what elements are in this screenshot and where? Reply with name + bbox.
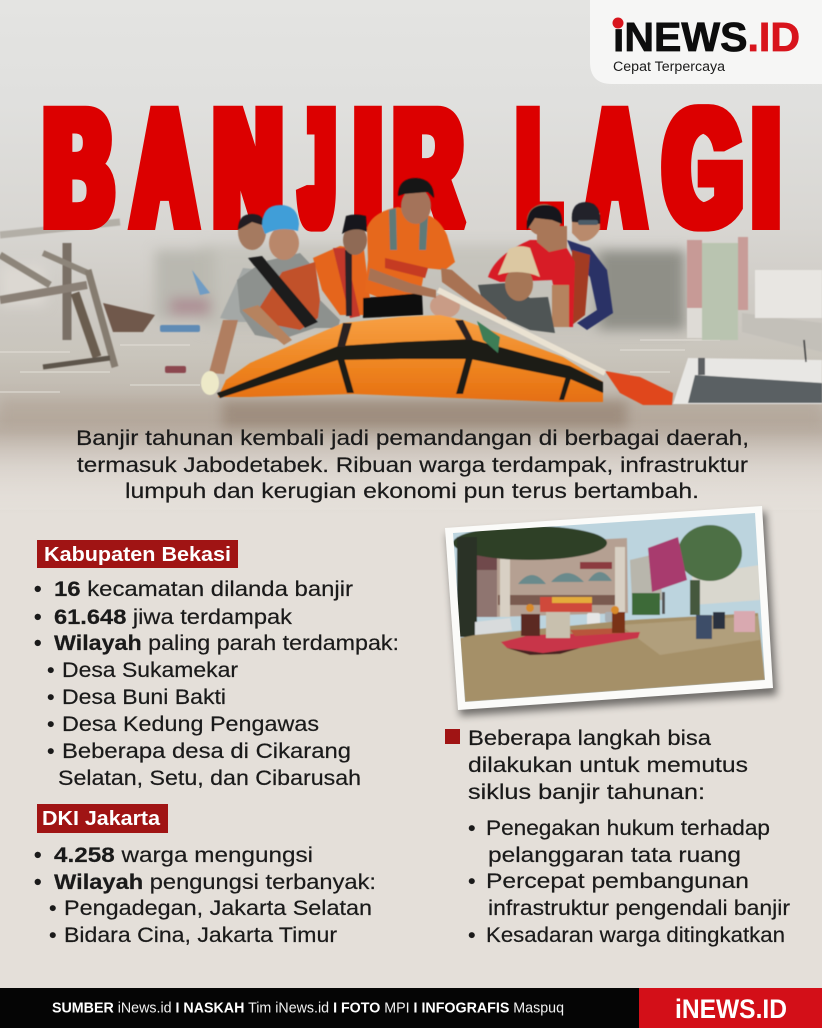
list: steps: Penegakan hukum terhadap xyxy=(486,816,770,840)
list: steps: • xyxy=(468,816,476,840)
callout: steps to break the flood cycle xyxy=(445,726,790,947)
list: steps: pelanggaran tata ruang xyxy=(488,843,741,867)
intro paragraph: termasuk Jabodetabek. Ribuan warga terdampak, infrastruktur xyxy=(77,453,748,477)
person: blue helmet, orange life vest xyxy=(237,205,340,345)
floodwater xyxy=(460,613,765,702)
person: woman behind boat xyxy=(430,294,460,318)
pillars and wall on the right xyxy=(687,237,822,352)
wooden structure on the left xyxy=(0,222,120,367)
buildings xyxy=(630,553,662,600)
title: L xyxy=(519,76,559,261)
heading: DKI Jakarta: DKI Jakarta xyxy=(42,808,161,830)
title: B xyxy=(45,76,112,261)
list: Bekasi facts xyxy=(34,577,399,790)
list: Bekasi facts: • xyxy=(34,631,42,655)
list: steps: • xyxy=(468,869,476,893)
list: Bekasi facts: Desa Buni Bakti xyxy=(62,685,226,709)
intro paragraph xyxy=(76,426,749,503)
boat xyxy=(217,315,603,402)
list: steps xyxy=(468,816,790,947)
title: I xyxy=(754,76,778,261)
list: Bekasi facts: Desa Kedung Pengawas xyxy=(62,712,319,736)
red rescue boat xyxy=(501,632,640,653)
list: Jakarta facts xyxy=(34,843,376,947)
person: navy shirt, right rear xyxy=(567,202,613,330)
credits: SUMBER iNews.id I NASKAH Tim iNews.id I FOTO MPI I INFOGRAFIS Maspuq xyxy=(52,1000,564,1016)
list: Bekasi facts: 61.648 jiwa terdampak xyxy=(54,605,292,629)
logo: iNEWS.ID: Cepat Terpercaya xyxy=(613,59,726,74)
banner xyxy=(540,597,592,612)
list: Jakarta facts: Bidara Cina, Jakarta Timur xyxy=(64,923,337,947)
list: Bekasi facts: Selatan, Setu, dan Cibarusah xyxy=(58,766,361,790)
billboard xyxy=(648,537,687,592)
list: Bekasi facts: Wilayah paling parah terdampak: xyxy=(54,631,399,655)
drifting objects xyxy=(103,270,210,373)
cars xyxy=(475,618,512,637)
heading: DKI Jakarta xyxy=(37,804,168,833)
list: Bekasi facts: • xyxy=(34,605,42,629)
icon: red square bullet xyxy=(445,729,460,744)
water ripples xyxy=(0,340,720,392)
trees xyxy=(453,526,607,560)
list: steps: • xyxy=(468,923,476,947)
list: Bekasi facts: • xyxy=(34,577,42,601)
person: grey shirt with beige hat xyxy=(478,246,555,333)
list: Jakarta facts: • xyxy=(34,870,42,894)
logo: iNEWS.ID xyxy=(590,0,822,84)
list: Jakarta facts: • xyxy=(49,896,57,920)
title: R xyxy=(395,76,461,261)
person: orange vest rear xyxy=(313,214,372,318)
panel: Kabupaten Bekasi xyxy=(34,540,399,790)
logo: iNEWS.ID: iNEWS.ID xyxy=(613,14,800,60)
list: Bekasi facts: Beberapa desa di Cikarang xyxy=(62,739,351,763)
floodwater foreground xyxy=(0,420,822,510)
photo: flooded shopping street with red rescue boat xyxy=(445,505,777,716)
title: G xyxy=(665,76,741,261)
list: Bekasi facts: • xyxy=(47,739,55,763)
list: Jakarta facts: Wilayah pengungsi terbanyak: xyxy=(54,870,376,894)
text block: steps intro: siklus banjir tahunan: xyxy=(468,780,705,804)
footer logo xyxy=(639,988,822,1028)
heading: Kabupaten Bekasi: Kabupaten Bekasi xyxy=(44,544,231,566)
person: standing rescuer in orange uniform xyxy=(363,178,507,323)
list: Bekasi facts: Desa Sukamekar xyxy=(62,658,238,682)
heading: Kabupaten Bekasi xyxy=(37,540,238,568)
title: J xyxy=(302,76,333,261)
footer bar xyxy=(0,988,822,1028)
text block: steps intro: dilakukan untuk memutus xyxy=(468,753,748,777)
people wading xyxy=(696,615,712,639)
text block: steps intro xyxy=(468,726,748,804)
intro paragraph: lumpuh dan kerugian ekonomi pun terus bertambah. xyxy=(125,479,699,503)
list: Jakarta facts: • xyxy=(49,923,57,947)
title: A xyxy=(587,76,643,261)
list: Bekasi facts: • xyxy=(47,685,55,709)
title: N xyxy=(215,76,281,261)
title: A xyxy=(134,76,195,261)
title: I xyxy=(356,76,380,261)
rescue team in boat xyxy=(201,178,822,405)
person: far left grey shirt xyxy=(201,214,266,395)
list: steps: infrastruktur pengendali banjir xyxy=(488,896,790,920)
list: Bekasi facts: • xyxy=(47,658,55,682)
intro paragraph: Banjir tahunan kembali jadi pemandangan di berbagai daerah, xyxy=(76,426,749,450)
list: Jakarta facts: Pengadegan, Jakarta Selatan xyxy=(64,896,372,920)
car xyxy=(673,340,822,404)
list: Jakarta facts: • xyxy=(34,843,42,867)
list: Bekasi facts: • xyxy=(47,712,55,736)
panel: DKI Jakarta xyxy=(34,804,376,947)
flood scenery xyxy=(0,245,822,432)
footer logo: iNEWS.ID xyxy=(675,994,787,1024)
list: steps: Kesadaran warga ditingkatkan xyxy=(486,923,785,947)
text block: steps intro: Beberapa langkah bisa xyxy=(468,726,711,750)
person: red shirt xyxy=(488,204,575,327)
list: Bekasi facts: 16 kecamatan dilanda banjir xyxy=(54,577,353,601)
list: Jakarta facts: 4.258 warga mengungsi xyxy=(54,843,313,867)
list: steps: Percepat pembangunan xyxy=(486,869,749,893)
paddle xyxy=(438,290,673,405)
